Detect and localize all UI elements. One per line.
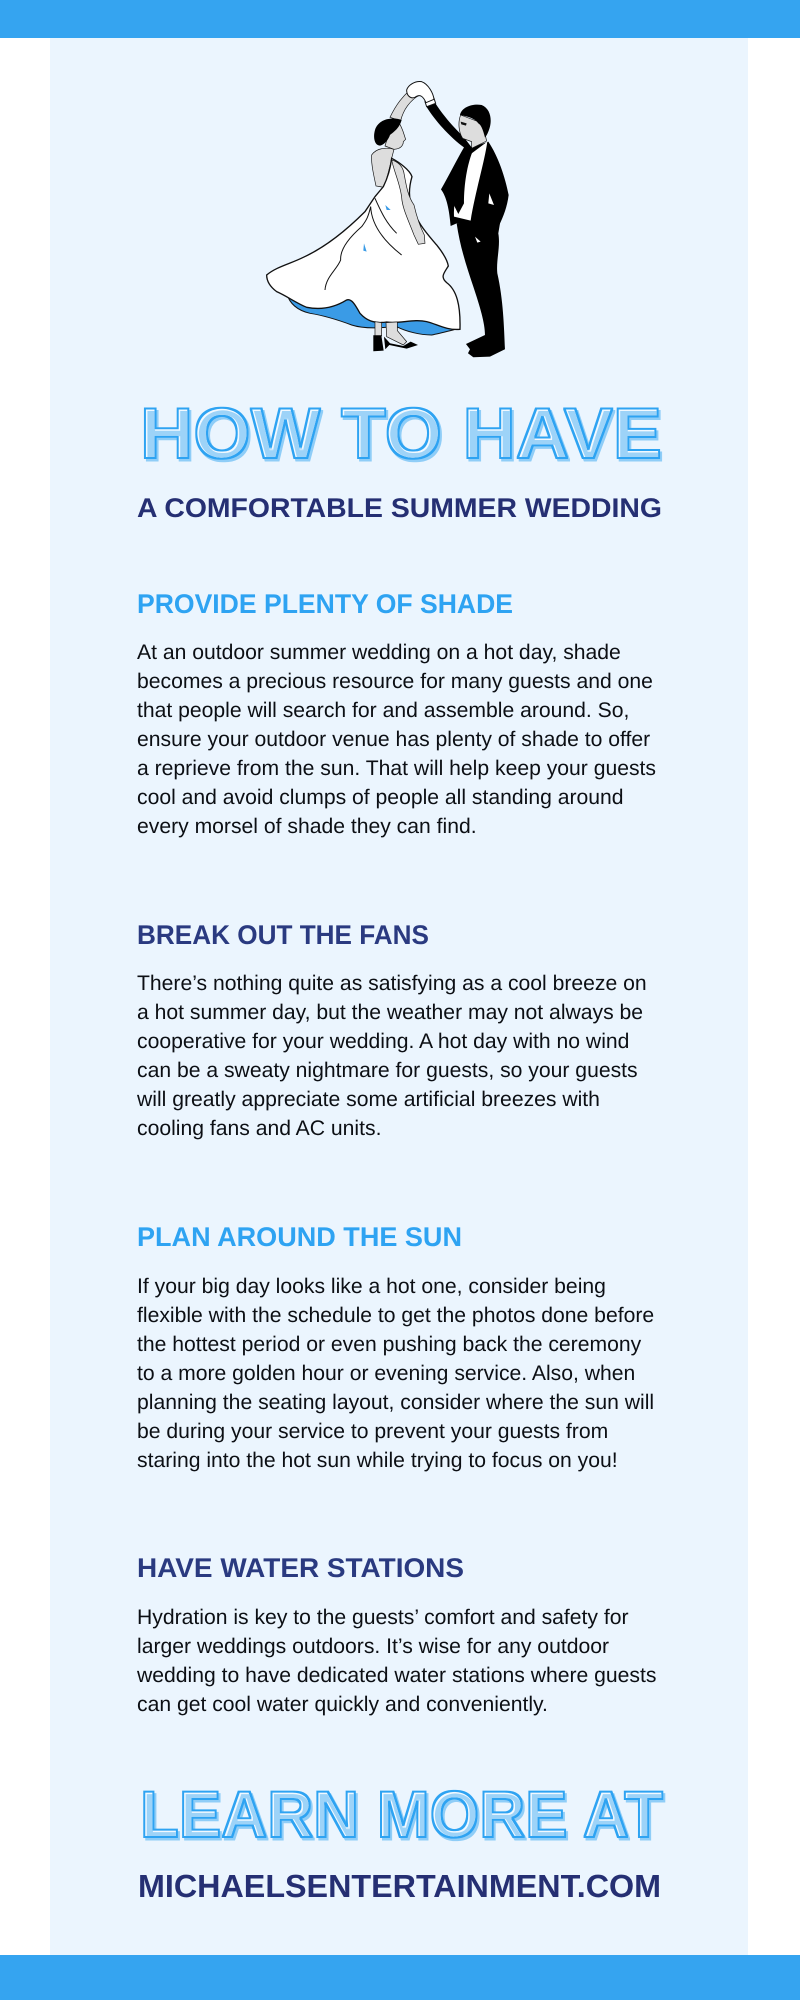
top bar (0, 0, 800, 38)
body text: ensure your outdoor venue has plenty of shade to offer (137, 728, 650, 751)
subtitle: A COMFORTABLE SUMMER WEDDING (137, 493, 662, 523)
section: plan around the sun (137, 1222, 654, 1472)
call to action heading: LEARN MORE AT (140, 1777, 663, 1851)
bride arm (392, 160, 425, 244)
body text: staring into the hot sun while trying to focus on you! (137, 1449, 618, 1472)
body text: can be a sweaty nightmare for guests, so your guests (137, 1059, 638, 1082)
illustration: dancing couple (267, 82, 509, 357)
body text (136, 1606, 656, 1716)
section: break out the fans (136, 920, 647, 1140)
body text: the hottest period or even pushing back the ceremony (137, 1333, 642, 1356)
body text: can get cool water quickly and conveniently. (137, 1693, 548, 1716)
body text: cooling fans and AC units. (137, 1117, 381, 1140)
heading: BREAK OUT THE FANS (137, 920, 429, 950)
body text: a hot summer day, but the weather may not always be (137, 1001, 643, 1024)
body text: wedding to have dedicated water stations where guests (136, 1664, 656, 1687)
body text: flexible with the schedule to get the photos done before (137, 1304, 654, 1327)
heading: HAVE WATER STATIONS (137, 1553, 464, 1583)
body text: There’s nothing quite as satisfying as a cool breeze on (137, 972, 647, 995)
body text: larger weddings outdoors. It’s wise for any outdoor (137, 1635, 609, 1658)
wedding dress (267, 158, 460, 329)
body text: Hydration is key to the guests’ comfort and safety for (137, 1606, 629, 1629)
section: provide plenty of shade (137, 589, 656, 838)
blue underskirt (287, 290, 458, 335)
bride upper body (372, 90, 420, 187)
bottom bar (0, 1955, 800, 2000)
dress folds (325, 198, 402, 290)
section: have water stations (136, 1553, 656, 1716)
body text: cool and avoid clumps of people all standing around (137, 786, 624, 809)
body text: will greatly appreciate some artificial breezes with (136, 1088, 600, 1111)
bride legs and shoes (373, 322, 418, 351)
groom (425, 98, 509, 357)
body text: At an outdoor summer wedding on a hot day, shade (137, 641, 621, 664)
body text: every morsel of shade they can find. (137, 815, 477, 838)
body text: planning the seating layout, consider where the sun will (137, 1391, 654, 1414)
website url: MICHAELSENTERTAINMENT.COM (138, 1868, 661, 1904)
heading: PROVIDE PLENTY OF SHADE (137, 589, 513, 619)
joined hands (407, 82, 434, 103)
body text (136, 972, 647, 1140)
body text: be during your service to prevent your guests from (137, 1420, 608, 1443)
body text (137, 641, 656, 838)
body text: If your big day looks like a hot one, consider being (137, 1275, 606, 1298)
body text: cooperative for your wedding. A hot day with no wind (137, 1030, 629, 1053)
body text (137, 1275, 654, 1472)
body text: becomes a precious resource for many guests and one (137, 670, 653, 693)
body text: to a more golden hour or evening service. Also, when (137, 1362, 635, 1385)
heading: PLAN AROUND THE SUN (137, 1222, 462, 1252)
body text: that people will search for and assemble around. So, (137, 699, 629, 722)
body text: a reprieve from the sun. That will help keep your guests (137, 757, 656, 780)
title: HOW TO HAVE (140, 394, 662, 474)
